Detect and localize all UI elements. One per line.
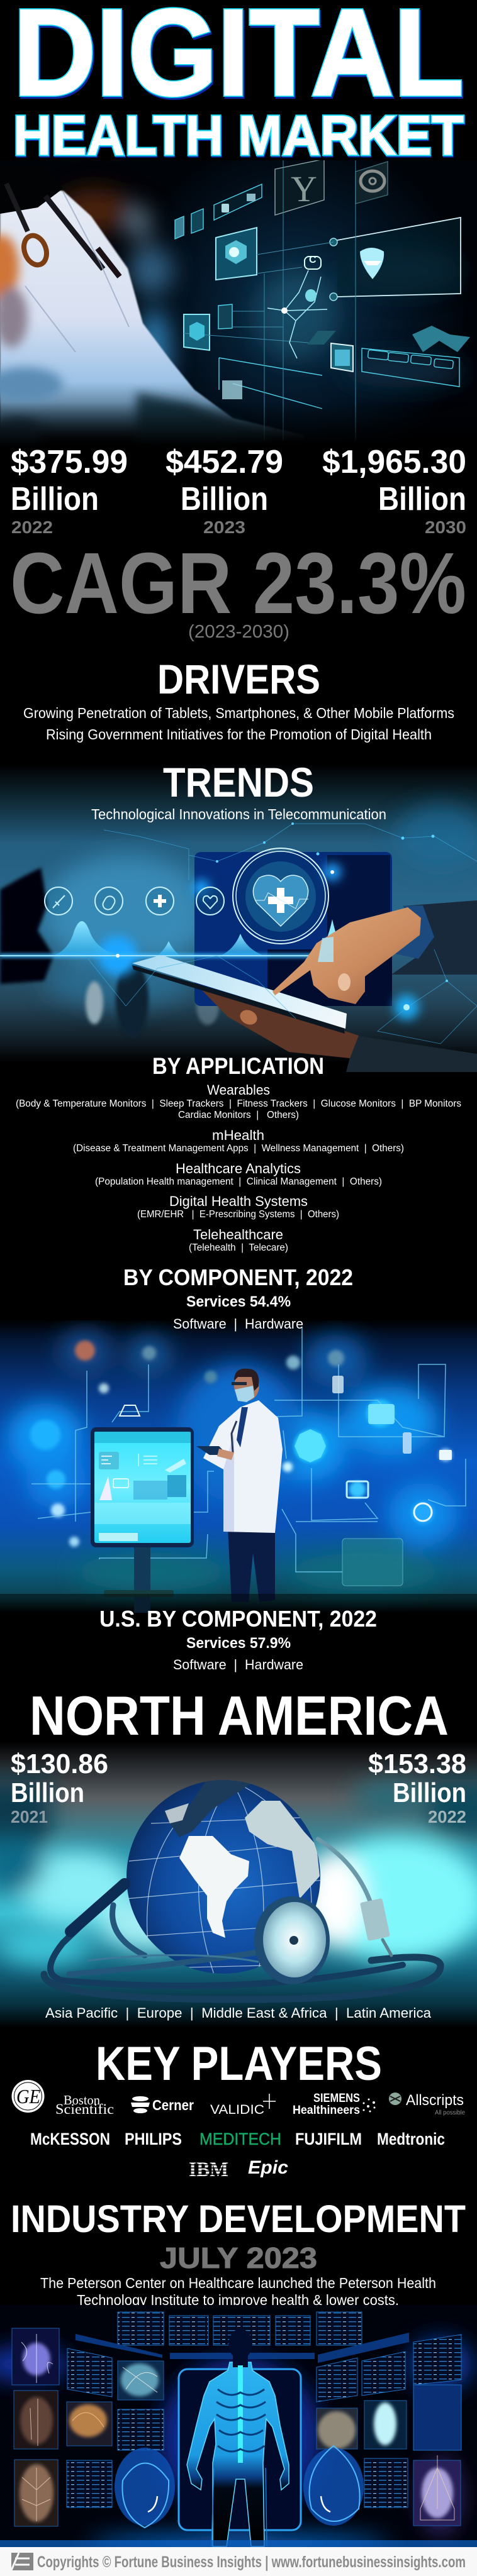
stat 2022: Billion xyxy=(11,481,99,517)
by component section: BY COMPONENT, 2022 xyxy=(123,1264,353,1290)
drivers section: Growing Penetration of Tablets, Smartphones, & Other Mobile Platforms xyxy=(23,705,454,721)
globe and stethoscope image xyxy=(0,1742,477,2028)
by application section xyxy=(16,1053,461,1253)
stat 2022: $375.99 xyxy=(11,444,128,480)
value 2022: Billion xyxy=(393,1777,466,1808)
mHealth: (Disease & Treatment Management Apps | Wellness Management | Others) xyxy=(73,1143,404,1154)
trends section: TRENDS xyxy=(163,759,314,805)
logo: Meditech: MEDITECH xyxy=(199,2130,281,2148)
mHealth: mHealth xyxy=(212,1127,264,1143)
healthcare analytics: Healthcare Analytics xyxy=(176,1161,301,1176)
regions list: Asia Pacific | Europe | Middle East & Africa | Latin America xyxy=(45,2005,432,2021)
company logos xyxy=(11,2080,465,2181)
telehealthcare: Telehealthcare xyxy=(193,1227,283,1242)
stat 2023: $452.79 xyxy=(166,444,283,480)
U.S. by component section: Software | Hardware xyxy=(173,1657,303,1672)
trends section: Technological Innovations in Telecommunication xyxy=(91,806,386,822)
doctor coat xyxy=(0,190,295,437)
drivers section: DRIVERS xyxy=(157,656,320,702)
U.S. by component section xyxy=(99,1606,377,1672)
logo: Cerner: Cerner xyxy=(152,2097,194,2113)
hologram icons: Y xyxy=(291,169,317,209)
stat 2030: 2030 xyxy=(425,517,466,537)
stat 2022 xyxy=(11,444,128,537)
logo: Allscripts: Allscripts xyxy=(406,2092,464,2109)
value 2021 xyxy=(11,1749,108,1827)
logo: Siemens Healthineers: SIEMENS xyxy=(313,2092,360,2105)
doctor figure xyxy=(196,1369,283,1602)
trends section xyxy=(91,759,386,822)
stethoscope xyxy=(6,184,129,352)
stat 2030 xyxy=(322,444,466,537)
background screen xyxy=(194,852,392,1006)
logo: Boston Scientific xyxy=(55,2092,114,2117)
blue organ holograms xyxy=(115,2446,364,2528)
hologram icons: C xyxy=(309,255,317,265)
market size stats xyxy=(11,444,466,537)
arm, hands and tablet xyxy=(132,900,477,1072)
by component section: Services 54.4% xyxy=(186,1293,291,1310)
mHealth xyxy=(73,1127,404,1154)
industry development section xyxy=(11,2197,466,2308)
wearables: Cardiac Monitors | Others) xyxy=(178,1110,299,1120)
logo: Siemens Healthineers xyxy=(293,2092,375,2117)
digital health systems: (EMR/EHR | E-Prescribing Systems | Others) xyxy=(137,1209,339,1220)
hero image: doctor and holographic interface xyxy=(0,159,477,450)
logo: Boston Scientific: Boston xyxy=(64,2092,100,2108)
body frame xyxy=(179,2369,301,2530)
logo: IBM: IBM xyxy=(189,2159,228,2181)
title: Digital Health Market: HEALTH MARKET xyxy=(13,104,464,167)
stat 2023: 2023 xyxy=(203,517,245,537)
industry development section: The Peterson Center on Healthcare launched the Peterson Health xyxy=(40,2275,436,2291)
U.S. by component section: U.S. BY COMPONENT, 2022 xyxy=(99,1606,377,1632)
logo: Medtronic: Medtronic xyxy=(377,2130,445,2148)
value 2021: Billion xyxy=(11,1777,84,1808)
stethoscope xyxy=(44,1839,441,1999)
regional values xyxy=(11,1749,466,1827)
doctor image: digital health network xyxy=(0,1320,477,1616)
wearables: (Body & Temperature Monitors | Sleep Trackers | Fitness Trackers | Glucose Monitors | BP Monitors xyxy=(16,1098,461,1109)
logo: Epic: Epic xyxy=(248,2157,288,2178)
industry development section: Technology Institute to improve health & lower costs. xyxy=(77,2292,399,2308)
chest piece xyxy=(254,1896,330,1984)
holographic panels xyxy=(175,159,470,440)
digital health systems xyxy=(137,1193,339,1220)
network mesh xyxy=(88,824,477,1044)
health icons row xyxy=(45,887,224,915)
value 2021: 2021 xyxy=(11,1807,48,1827)
hologram icons xyxy=(189,169,384,399)
wearables: Wearables xyxy=(207,1082,270,1098)
healthcare analytics xyxy=(95,1161,382,1187)
large heart emblem xyxy=(233,848,328,944)
by component section xyxy=(123,1264,353,1332)
value 2022: $153.38 xyxy=(368,1749,466,1779)
healthcare analytics: (Population Health management | Clinical Management | Others) xyxy=(95,1176,382,1187)
logo: McKesson: McKESSON xyxy=(30,2130,110,2148)
continents xyxy=(179,1836,249,1938)
drivers section: Rising Government Initiatives for the Promotion of Digital Health xyxy=(46,726,432,743)
tablet kiosk on stand xyxy=(91,1427,194,1616)
stat 2023 xyxy=(166,444,283,537)
organ panels xyxy=(12,2328,461,2526)
logo: Cerner xyxy=(131,2096,194,2113)
logo: Fujifilm: FUJIFILM xyxy=(295,2130,362,2148)
glowing line xyxy=(0,954,352,958)
logo: Boston Scientific: Scientific xyxy=(55,2101,114,2117)
by application section: BY APPLICATION xyxy=(152,1053,324,1079)
telehealthcare: (Telehealth | Telecare) xyxy=(189,1242,288,1253)
stat 2030: $1,965.30 xyxy=(322,444,466,480)
glowing nodes xyxy=(30,1341,452,1547)
value 2021: $130.86 xyxy=(11,1749,108,1779)
value 2022 xyxy=(368,1749,466,1827)
U.S. by component section: Services 57.9% xyxy=(186,1635,291,1652)
stat 2022: 2022 xyxy=(11,517,53,537)
telehealthcare xyxy=(189,1227,288,1253)
logo: Siemens Healthineers: Healthineers xyxy=(293,2104,360,2117)
logo: Philips: PHILIPS xyxy=(125,2130,182,2148)
digital health systems: Digital Health Systems xyxy=(169,1193,308,1209)
heading: key players: KEY PLAYERS xyxy=(96,2037,382,2091)
globe xyxy=(126,1778,324,1974)
logo: Allscripts: All possible xyxy=(435,2109,465,2116)
logo: Validic: VALIDIC xyxy=(210,2103,264,2117)
icon tiles xyxy=(120,1376,452,1586)
stat 2030: Billion xyxy=(378,481,466,517)
footer logo xyxy=(11,2553,33,2570)
footer bar xyxy=(0,2547,477,2576)
drivers section xyxy=(23,656,454,743)
trends image: hand on tablet with health icons xyxy=(0,764,477,1072)
industry development section: JULY 2023 xyxy=(160,2242,317,2274)
logo: Validic xyxy=(210,2094,276,2117)
logo: GE: GE xyxy=(16,2085,40,2108)
logo: Allscripts xyxy=(389,2092,465,2116)
waveform peaks xyxy=(53,919,347,956)
CAGR figure: (2023-2030) xyxy=(188,622,289,642)
circuit lines xyxy=(31,1327,466,1572)
body scan image: holographic human anatomy xyxy=(0,2305,477,2552)
data panels xyxy=(67,2312,461,2507)
by component section: Software | Hardware xyxy=(173,1316,303,1332)
title: Digital Health Market: HEALTH MARKET xyxy=(13,104,464,167)
stat 2023: Billion xyxy=(181,481,268,517)
wearables xyxy=(16,1082,461,1120)
logo: GE xyxy=(11,2080,44,2113)
human figure xyxy=(187,2329,289,2546)
value 2022: 2022 xyxy=(428,1807,466,1827)
